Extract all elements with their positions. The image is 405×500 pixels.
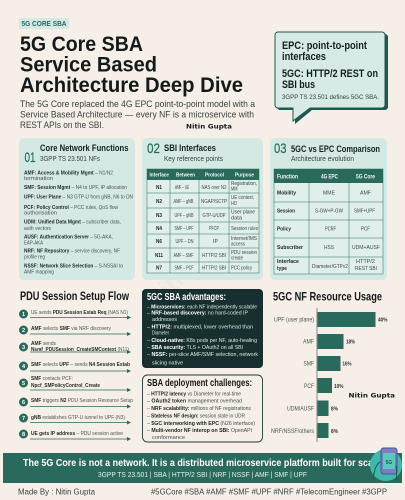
table: comparison: Diameter/GTPv2 (312, 264, 348, 270)
table: comparison: Subscriber (277, 245, 304, 251)
panel: 5GC vs EPC comparison: 5GC vs EPC Comparison (291, 144, 380, 155)
panel: 5GC SBA advantages: – NSSF: per-slice AMF/SMF selection, network (147, 352, 258, 358)
icon: phone in hand: 5G (386, 460, 392, 466)
table: SBI interfaces: User plane (231, 210, 255, 216)
panel: core network functions: AUSF: Authentication Server – 5G-AKA, (24, 234, 113, 240)
text: Nitin Gupta (138, 195, 259, 316)
table: comparison: PCF (361, 226, 370, 232)
panel: 5GC SBA advantages: 5GC SBA advantages: (147, 291, 226, 303)
heading: PDU session setup flow: PDU Session Setup Flow (20, 291, 129, 303)
flow: PDU session steps: 7 (22, 416, 25, 422)
bar chart: NF resource usage: AMF (303, 338, 314, 346)
watermark: author name chart: Nitin Gupta (348, 392, 395, 400)
panel: SBA deployment challenges: conformance (152, 435, 186, 441)
table: comparison: Function (277, 174, 298, 180)
table: comparison: Interface (277, 259, 300, 265)
table: comparison: HSS (324, 245, 334, 251)
panel: SBA deployment challenges (142, 375, 262, 442)
table: SBI interfaces: N2 (156, 199, 162, 205)
table: comparison: UDM+AUSF (352, 245, 380, 251)
bar chart: NF resource usage: PCF (304, 383, 314, 390)
bar chart: NF resource usage: 8% (331, 429, 338, 435)
panel: 5GC SBA advantages (142, 289, 263, 368)
bar chart: NF resource usage (271, 308, 388, 442)
table: SBI interfaces: AMF – UE (175, 185, 189, 191)
table: comparison: AMF (360, 190, 371, 196)
flow: PDU session steps: SMF contacts PCF: (31, 376, 73, 382)
table: SBI interfaces: AMF – SMF (174, 253, 194, 259)
table: SBI interfaces: PCC policy (231, 266, 252, 272)
panel number 03: 03 (274, 140, 287, 156)
panel: 5GC SBA advantages: Diameter (152, 330, 169, 336)
table: SBI interfaces (147, 169, 259, 273)
flow: PDU session steps: gNB establishes GTP-U tunnel to UPF (N3) (31, 415, 125, 421)
title: Service Based (20, 54, 157, 76)
table: SBI interfaces: HTTP/2 SBI (202, 253, 226, 259)
table: SBI interfaces: data (231, 216, 242, 222)
intro text: Service Based Architecture — every NF is a microservice with (20, 110, 254, 120)
panel: SBA deployment challenges: – NRF scalability: millions of NF registrations (147, 406, 251, 412)
table: SBI interfaces: N3 (156, 213, 163, 219)
table: comparison: 4G EPC (321, 174, 339, 180)
table: SBI interfaces: Internet/IMS (231, 236, 257, 242)
panel: core network functions: UDM: Unified Data Mgmt – subscriber data, (24, 220, 121, 226)
intro text (20, 99, 255, 130)
table: SBI interfaces: access (231, 242, 245, 248)
table: comparison: MME (323, 190, 335, 196)
callout: EPC vs 5GC: SBI bus (282, 79, 315, 91)
flow: PDU session steps: Nsmf_PDUSession_CreateSMContext (N11) (31, 347, 129, 353)
callout: EPC vs 5GC (275, 32, 388, 124)
panel: SBI interfaces: Key reference points (164, 154, 223, 163)
flow: PDU session steps: AMF selects SMF via NRF discovery (31, 326, 111, 332)
callout: EPC vs 5GC: interfaces (282, 51, 326, 63)
table: SBI interfaces: PFCP (209, 226, 219, 232)
table: SBI interfaces: Interface (150, 172, 169, 178)
footer: hashtags: #5GCore #SBA #AMF #SMF #UPF #NRF #TelecomEngineer #3GPP (151, 486, 387, 496)
bar chart: NF resource usage: NRF/NSSF/others (271, 428, 315, 435)
panel: core network functions: NSSF: Network Slice Selection – S-NSSAI to (24, 264, 123, 270)
banner: The 5G Core is not a network. It is a distributed microservice platform built for sca (23, 458, 373, 469)
table: SBI interfaces: create (231, 256, 243, 262)
panel: 5GC SBA advantages: – Cloud-native: K8s pods per NF, auto-healing (147, 338, 257, 344)
flow: PDU session steps: AMF sends (31, 341, 56, 347)
tag: 5G CORE SBA: 5G CORE SBA (22, 21, 66, 28)
flow: PDU session steps: 6 (22, 400, 25, 406)
banner (3, 453, 402, 483)
table: SBI interfaces: N6 (156, 239, 163, 245)
table: comparison: HTTP/2 (356, 259, 375, 265)
panel: 5GC SBA advantages: – HTTP/2: multiplexed, lower overhead than (147, 324, 253, 330)
table: comparison: S-GW+P-GW (315, 208, 343, 214)
table: comparison: SMF+UPF (354, 208, 375, 214)
callout: EPC vs 5GC: EPC: point-to-point (282, 40, 367, 52)
bar chart: NF resource usage: UDM/AUSF (287, 406, 314, 412)
bar chart: NF resource usage: SMF (304, 360, 314, 368)
table: SBI interfaces: GTP-U/UDP (202, 213, 226, 219)
bar chart: NF resource usage: 40% (378, 318, 388, 324)
panel number 02: 02 (147, 140, 160, 156)
panel: 5GC SBA advantages: – Microservices: each NF independently scalable (147, 304, 258, 310)
intro text: The 5G Core replaced the 4G EPC point-to-point model with a (20, 99, 255, 109)
flow: PDU session steps: 5 (22, 381, 25, 387)
panel: core network functions: UPF: User Plane – N3 GTP-U from gNB, N6 to DN (24, 195, 133, 201)
flow: PDU session steps: 4 (22, 364, 26, 370)
panel: SBI interfaces: SBI Interfaces (164, 143, 216, 154)
table: comparison: Session (277, 208, 295, 214)
panel: SBA deployment challenges: – 5GC interworking with EPC (N26 interface) (147, 421, 255, 427)
table: SBI interfaces: HO (231, 201, 237, 207)
panel: 5GC SBA advantages: – NRF-based discovery: no hard-coded IP (147, 310, 248, 316)
table: SBI interfaces: Registration, (231, 181, 257, 187)
panel: core network functions: AMF mapping (24, 270, 54, 276)
table: comparison (274, 169, 383, 274)
callout: EPC vs 5GC: 5GC: HTTP/2 REST on (282, 68, 378, 80)
table: SBI interfaces: MM (231, 186, 238, 192)
bar chart: NF resource usage: 10% (334, 384, 344, 390)
table: SBI interfaces: NAS over N2 (202, 185, 227, 191)
table: SBI interfaces: N1 (156, 185, 163, 191)
table: SBI interfaces: Session rules (231, 226, 258, 232)
icon: phone in hand (370, 448, 402, 481)
bar chart: NF resource usage: 16% (342, 362, 352, 368)
bar chart: NF resource usage: 8% (331, 406, 338, 412)
table: comparison: type (277, 266, 288, 272)
panel: core network functions: EAP-AKA (24, 240, 43, 246)
flow: PDU session steps: SMF selects UPF – sends N4 Session Estab (31, 362, 131, 368)
table: SBI interfaces: SMF – PCF (174, 266, 194, 272)
panel: SBA deployment challenges: – Stateless NF design: session state in UDR (147, 414, 245, 420)
panel: core network functions: termination (24, 176, 53, 182)
table: comparison: Policy (277, 226, 292, 232)
panel: core network functions: authorisation (24, 210, 57, 216)
table: SBI interfaces: UPF – gNB (174, 213, 194, 219)
panel: 5GC SBA advantages: – SBA security: TLS + OAuth2 on all SBI (147, 345, 243, 351)
panel: SBA deployment challenges: – Multi-vendor NF interop on SBI: OpenAPI (147, 428, 252, 434)
flow: PDU session steps (19, 310, 133, 441)
table: SBI interfaces: SMF – UPF (174, 226, 194, 232)
flow: PDU session steps: 1 (22, 312, 25, 318)
panel: core network functions: 3GPP TS 23.501 NFs (40, 154, 100, 163)
watermark: author name top: Nitin Gupta (186, 124, 232, 130)
flow: PDU session steps: SMF triggers N2 PDU Session Resource Setup (31, 398, 133, 404)
panel: 5GC vs EPC comparison: Architecture evolution (291, 154, 354, 163)
table: comparison: REST SBI (355, 266, 377, 272)
table: SBI interfaces: N11 (155, 253, 164, 259)
table: comparison: Mobility (277, 190, 297, 196)
flow: PDU session steps: 3 (22, 345, 25, 351)
table: SBI interfaces: UPF – DN (176, 239, 194, 245)
table: SBI interfaces: HTTP/2 SBI (202, 266, 226, 272)
flow: PDU session steps: 2 (22, 328, 25, 334)
panel: core network functions: NRF: NF Repository – service discovery, NF (24, 248, 121, 254)
panel: core network functions: auth vectors (24, 226, 51, 232)
title (20, 33, 243, 97)
panel number 01: 01 (24, 149, 36, 165)
intro text: REST APIs on the SBI. (20, 120, 104, 130)
table: comparison: 5G Core (356, 174, 376, 180)
table: SBI interfaces: IP (213, 239, 218, 245)
panel: 5GC vs EPC comparison (270, 138, 387, 280)
table: SBI interfaces: Purpose (235, 172, 254, 178)
title: 5G Core SBA (20, 33, 143, 56)
flow: PDU session steps: Npcf_SMPolicyControl_Create (31, 383, 100, 389)
panel: core network functions (19, 138, 135, 280)
bar chart: NF resource usage: 18% (346, 340, 355, 346)
title: Architecture Deep Dive (20, 74, 243, 97)
tag: 5G CORE SBA (19, 18, 69, 29)
panel: SBA deployment challenges: SBA deployment challenges: (147, 378, 252, 389)
table: comparison: PCRF (325, 226, 336, 232)
bar chart: NF resource usage: UPF (user plane) (274, 316, 314, 324)
flow: PDU session steps: UE gets IP address – PDU session active (31, 431, 123, 437)
panel: core network functions: AMF: Access & Mobility Mgmt – N1/N2 (24, 170, 113, 176)
heading: NF resource usage: 5GC NF Resource Usage (273, 292, 382, 304)
table: SBI interfaces: Between (176, 172, 195, 178)
panel: core network functions: SMF: Session Mgmt – N4 to UPF, IP allocation (24, 185, 127, 191)
table: SBI interfaces: UE context, (231, 195, 254, 201)
table: SBI interfaces: N4 (156, 226, 163, 232)
panel: core network functions: PCF: Policy Control – PCC rules, QoS flow (24, 205, 118, 211)
callout: EPC vs 5GC: 3GPP TS 23.501 defines 5GC SBA. (282, 95, 379, 101)
table: SBI interfaces: AMF – gNB (174, 199, 194, 205)
panel: 5GC SBA advantages: addresses (152, 317, 177, 323)
panel: core network functions: profile reg (24, 254, 45, 260)
panel: SBI interfaces (142, 138, 263, 280)
table: SBI interfaces: Protocol (205, 172, 224, 178)
table: SBI interfaces: PDU session (231, 250, 257, 256)
flow: PDU session steps: 8 (22, 432, 25, 438)
panel: 5GC SBA advantages: slicing native (152, 360, 184, 366)
footer: author: Made By : Nitin Gupta (18, 486, 95, 496)
panel: SBA deployment challenges: – OAuth2 token management overhead (147, 398, 242, 404)
panel: core network functions: Core Network Functions (40, 143, 128, 154)
flow: PDU session steps: UE sends PDU Session Estab Req (NAS N1) (31, 310, 128, 316)
table: SBI interfaces: N7 (156, 266, 162, 272)
table: SBI interfaces: NGAP/SCTP (201, 199, 227, 205)
banner: 3GPP TS 23.501 | SBA | HTTP/2 SBI | NRF | NSSF | AMF | SMF | UPF (98, 472, 307, 479)
panel: SBA deployment challenges: – HTTP/2 latency vs Diameter for real-time (147, 392, 242, 398)
